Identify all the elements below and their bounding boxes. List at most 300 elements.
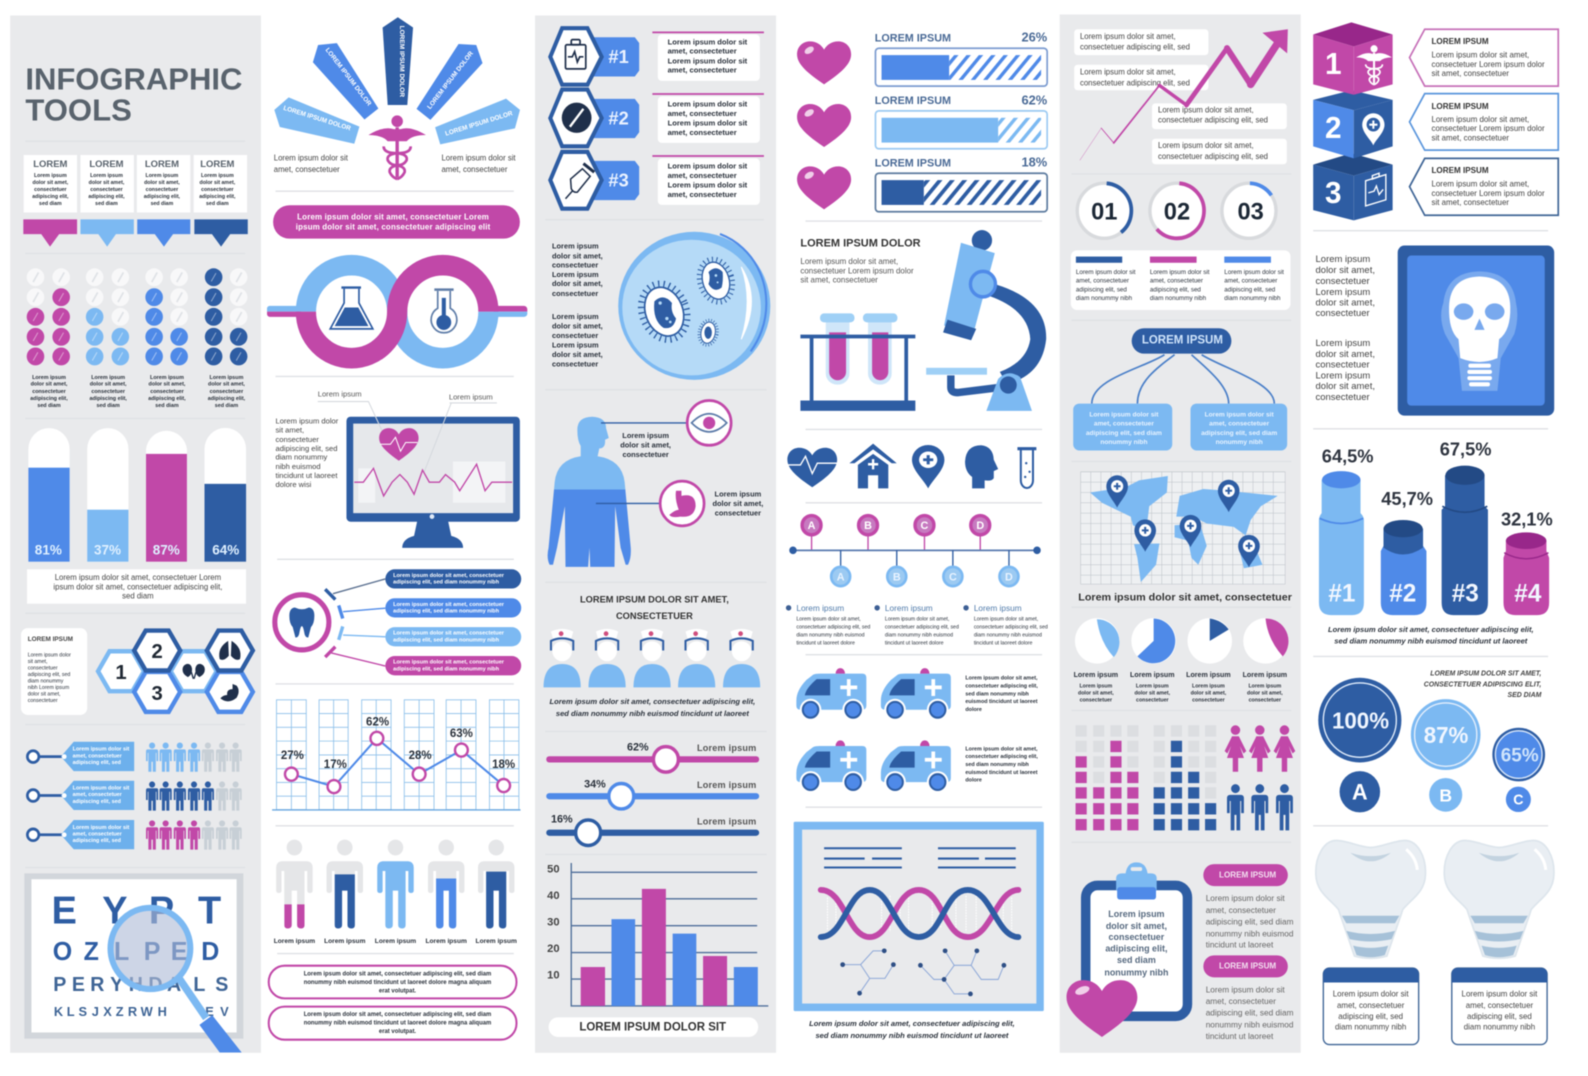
callouts beside cubes: consectetuer Lorem ipsum dolor (1431, 189, 1545, 198)
eye chart with magnifier: L (114, 938, 129, 966)
fan captions: amet, consectetuer (274, 165, 340, 174)
side notes with pills: tincidunt ut laoreet (1206, 939, 1274, 949)
monitor labels and description (275, 390, 493, 489)
icon: syringe (566, 164, 594, 199)
stomach callout (660, 481, 763, 526)
pie charts: Lorem ipsum (1136, 684, 1169, 690)
x-ray text: dolor sit amet, (1316, 381, 1375, 392)
bar chart: 30 (547, 916, 560, 928)
eye chart with magnifier: K (54, 1004, 64, 1019)
percentage circles: A (1352, 779, 1368, 805)
callout cards: LOREM (89, 159, 124, 170)
capsule bar chart: 37% (94, 542, 121, 557)
percentage circles (1318, 678, 1545, 812)
clipboard note: adipiscing elit, (1105, 943, 1167, 954)
lab heading: Lorem ipsum dolor sit amet, (800, 257, 898, 266)
timeline axis: A (837, 571, 845, 583)
tag rows with people pictograms: Lorem ipsum dolor sit (73, 786, 129, 792)
stomach callout: dolor sit amet, (712, 499, 763, 508)
capsule bar chart (28, 428, 246, 562)
x-ray text: consectetuer (1316, 276, 1371, 287)
cylinder chart: #3 (1452, 580, 1479, 607)
monitor labels and description: adipiscing elit, sed (275, 444, 337, 453)
callouts beside cubes: sit amet, consectetuer (1431, 133, 1509, 143)
petri dish text: consectetuer (552, 331, 598, 340)
cylinder chart values (1322, 438, 1553, 530)
rising arrow chart text boxes: Lorem ipsum dolor sit amet, (1080, 32, 1176, 41)
timeline text columns: Lorem ipsum dolor sit amet, (885, 617, 949, 623)
icon row (787, 444, 1036, 488)
bar chart caption (27, 569, 246, 604)
pie charts: dolor sit amet, (1078, 691, 1114, 697)
callout cards: LOREM (200, 159, 234, 170)
sliders (549, 742, 756, 845)
ambulance text: dolore (965, 707, 982, 713)
percentage circles: B (1439, 785, 1452, 805)
branching diagram: LOREM IPSUM (1142, 334, 1223, 347)
monitor labels and description: Lorem ipsum (449, 392, 493, 402)
petri dish text: consectetuer (552, 359, 598, 368)
title: TOOLS (25, 92, 132, 128)
rising arrow chart text boxes (1074, 29, 1287, 164)
timeline text columns: diam nonummy nibh euismod (796, 632, 865, 638)
tag rows with people pictograms: Lorem ipsum dolor sit (73, 825, 129, 831)
DNA caption: Lorem ipsum dolor sit amet, consectetuer adipiscing elit, (809, 1019, 1015, 1028)
implant cards: Lorem ipsum dolor sit (1333, 990, 1409, 999)
sliders: Lorem ipsum (697, 816, 756, 826)
fan captions: Lorem ipsum dolor sit (274, 153, 349, 163)
cylinder chart caption: sed diam nonummy nibh euismod tincidunt ut laoreet (1334, 637, 1528, 646)
heart progress bars (797, 30, 1048, 212)
line chart on grid columns: 27% (281, 749, 304, 762)
text cards with magenta rules: Lorem ipsum dolor sit (668, 37, 748, 46)
tag rows with people pictograms: adipiscing elit, sed (73, 760, 121, 766)
eye chart with magnifier: P (144, 938, 160, 966)
numbered hexagon badges (550, 28, 639, 209)
side notes with pills: amet, consectetuer (1206, 996, 1276, 1006)
petri dish text: dolor sit amet, (552, 321, 603, 331)
clipboard note: consectetuer (1109, 932, 1165, 942)
fan of ribbons (270, 17, 525, 151)
clipboard note: nonummy nibh (1104, 967, 1168, 977)
branching diagram: amet, consectetuer (1209, 421, 1270, 428)
branching diagram: Lorem ipsum dolor sit (1089, 411, 1159, 418)
fan captions: amet, consectetuer (441, 165, 508, 174)
callout cards: Lorem ipsum (90, 173, 123, 179)
callout cards: sed diam (151, 201, 174, 207)
callout cards: consectetuer (90, 187, 123, 193)
pie charts: Lorem ipsum (1248, 684, 1282, 690)
side notes with pills: nonummy nibh euismod (1206, 1019, 1294, 1029)
text cards with magenta rules: amet, consectetuer (668, 190, 737, 199)
text cards with magenta rules: amet, consectetuer (668, 65, 737, 74)
heart progress bars: 18% (1021, 155, 1048, 170)
nurses row (544, 629, 760, 687)
body silhouettes: Lorem ipsum (476, 938, 517, 945)
cylinder chart values: 32,1% (1501, 508, 1553, 530)
fan of ribbons: LOREM IPSUM DOLOR (398, 26, 405, 97)
x-ray text: Lorem ipsum (1316, 338, 1370, 349)
icon: location pin (912, 445, 944, 488)
x-ray text: consectetuer (1316, 308, 1371, 319)
tooth spoke diagram: Lorem ipsum dolor sit amet, consectetuer (393, 660, 505, 666)
sliders: Lorem ipsum (697, 743, 756, 753)
tooth spoke diagram: adipiscing elit, sed diam nonummy nibh (393, 666, 500, 673)
callout cards: consectetuer (201, 187, 234, 193)
pie charts: Lorem ipsum (1192, 684, 1225, 690)
x-ray text: Lorem ipsum (1316, 370, 1370, 382)
numbered hexagon badges: #2 (608, 108, 629, 129)
eye chart with magnifier: W (141, 1004, 154, 1019)
text cards with magenta rules: Lorem ipsum dolor sit (668, 162, 748, 171)
eye chart with magnifier: P (149, 889, 174, 933)
pill grid chart: consectetuer (32, 389, 67, 395)
eye chart with magnifier: J (92, 1004, 99, 1019)
tag rows with people pictograms: Lorem ipsum dolor sit (73, 747, 129, 753)
implant cards: Lorem ipsum dolor sit (1462, 990, 1538, 999)
eye callout: dolor sit amet, (620, 441, 671, 450)
capsule bar chart: 81% (35, 542, 62, 557)
side notes with pills (1203, 864, 1294, 1041)
petri dish text: dolor sit amet, (552, 251, 603, 260)
rising arrow chart text boxes: consectetuer adipiscing elit, sed (1158, 152, 1268, 161)
petri dish with bacteria (601, 209, 787, 403)
timeline axis: C (949, 571, 957, 583)
x-ray text: consectetuer (1316, 359, 1371, 370)
cube 3: 3 (1325, 177, 1342, 210)
ambulance text: dolore (965, 777, 982, 783)
body silhouettes (274, 840, 517, 945)
pill grid chart: Lorem ipsum (32, 375, 66, 381)
text cards with magenta rules: amet, consectetuer (668, 109, 737, 118)
cylinder chart: #4 (1514, 580, 1542, 607)
dental implants (1316, 841, 1554, 958)
title (25, 61, 242, 128)
map caption: Lorem ipsum dolor sit amet, consectetuer (1078, 593, 1292, 604)
x-ray skull (1398, 246, 1554, 416)
chart footer label (549, 1017, 758, 1037)
outlined capsule notes: nonummy nibh euismod tincidunt ut laoreet dolore magna aliquam (304, 980, 491, 986)
eye chart with magnifier: L (193, 974, 205, 996)
side notes with pills: adipiscing elit, sed diam (1206, 917, 1294, 927)
pie charts: dolor sit amet, (1134, 691, 1171, 697)
text card: lorem ipsum: Lorem ipsum dolor (28, 652, 71, 658)
bar chart: 10 (547, 970, 560, 982)
tooth spoke diagram: adipiscing elit, sed diam nonummy nibh (393, 638, 500, 644)
petri dish text (552, 242, 603, 368)
pill grid chart: dolor sit amet, (90, 382, 127, 388)
icon: conical flask (330, 288, 373, 329)
implant cards: adipiscing elit, sed (1467, 1012, 1532, 1021)
eye chart with magnifier: H (158, 1004, 167, 1019)
sliders: 16% (551, 813, 573, 825)
implant cards: diam nonummy nibh (1464, 1023, 1535, 1032)
circles heading: LOREM IPSUM DOLOR SIT AMET, (1430, 670, 1541, 677)
percentage circles: 100% (1332, 708, 1389, 733)
lab heading: consectetuer Lorem ipsum dolor (800, 266, 914, 275)
text card: lorem ipsum: LOREM IPSUM (28, 636, 73, 643)
cylinder chart values: 64,5% (1322, 445, 1374, 467)
pill grid chart: dolor sit amet, (31, 382, 68, 388)
ambulance text: consectetuer adipiscing elit, (965, 683, 1038, 689)
callouts beside cubes: LOREM IPSUM (1431, 37, 1489, 46)
timeline text columns: Lorem ipsum (974, 603, 1022, 613)
implant cards: adipiscing elit, sed (1338, 1012, 1403, 1021)
timeline text columns: Lorem ipsum (796, 603, 844, 613)
rising arrow chart text boxes: Lorem ipsum dolor sit amet, (1158, 105, 1254, 114)
eye chart with magnifier: E (72, 974, 85, 996)
stomach callout: consectetuer (715, 508, 761, 518)
magenta banner (273, 205, 520, 239)
percentage circles: C (1513, 792, 1523, 809)
callouts beside cubes: sit amet, consectetuer (1431, 69, 1509, 78)
line chart on grid columns: 18% (492, 758, 515, 771)
pie charts (1074, 618, 1288, 704)
rising arrow chart text boxes: Lorem ipsum dolor sit amet, (1080, 68, 1176, 77)
three column note: diam nonummy nibh (1224, 295, 1281, 302)
callout cards: adipiscing elit, (199, 194, 236, 200)
stomach callout: Lorem ipsum (715, 490, 762, 499)
body silhouettes: Lorem ipsum (324, 938, 366, 945)
icon: heart pulse (787, 448, 838, 487)
cylinder chart values: 67,5% (1440, 438, 1491, 460)
rising arrow chart text boxes: consectetuer adipiscing elit, sed (1080, 43, 1190, 52)
panel: right grey column (1060, 14, 1301, 1053)
ambulance text: consectetuer adipiscing elit, (965, 754, 1038, 760)
panel: left grey column (10, 15, 261, 1053)
branching diagram: nonummy nibh (1216, 439, 1263, 446)
line chart on grid columns: 17% (324, 758, 347, 771)
three column note: diam nonummy nibh (1076, 295, 1133, 302)
text cards with magenta rules: amet, consectetuer (668, 47, 737, 56)
cylinder chart caption: Lorem ipsum dolor sit amet, consectetuer adipiscing elit, (1328, 625, 1534, 634)
fan of ribbons: LOREM IPSUM DOLOR (324, 47, 373, 108)
petri dish text: dolor sit amet, (552, 279, 603, 288)
progress ring 01 (1075, 181, 1134, 241)
numbered hexagon badges: #1 (608, 46, 629, 67)
callout cards: LOREM (145, 159, 179, 170)
eye chart with magnifier: S (79, 1004, 87, 1019)
progress ring 03 (1221, 182, 1277, 239)
three column note: Lorem ipsum dolor sit (1150, 269, 1210, 276)
hexagon organ diagram: 2 (152, 640, 163, 663)
eye chart with magnifier: A (167, 974, 181, 996)
lab heading (800, 237, 921, 285)
cube 3 (1313, 153, 1393, 220)
ambulance text: sed diam nonummy nibh (965, 762, 1029, 768)
nurses caption: Lorem ipsum dolor sit amet, consectetuer adipiscing elit, (550, 697, 755, 706)
timeline text columns: diam nonummy nibh euismod (885, 632, 953, 638)
fan captions (274, 153, 516, 174)
progress ring 03: 03 (1238, 199, 1264, 226)
callout cards: consectetuer (146, 187, 178, 193)
ambulance text: Lorem ipsum dolor sit amet, (965, 675, 1038, 681)
eye chart with magnifier: P (53, 974, 66, 996)
tooth spoke diagram: adipiscing elit, sed diam nonummy nibh (393, 580, 500, 586)
capsule bar chart: 64% (212, 542, 239, 557)
petri dish text: dolor sit amet, (552, 350, 603, 359)
sliders: Lorem ipsum (697, 780, 756, 790)
tooth spoke diagram: Lorem ipsum dolor sit amet, consectetuer (393, 602, 505, 608)
side notes with pills: Lorem ipsum dolor sit (1206, 984, 1285, 995)
timeline axis: D (1005, 571, 1013, 583)
fan captions: Lorem ipsum dolor sit (441, 153, 516, 163)
text card: lorem ipsum: diam nonummy (28, 679, 64, 685)
callout cards: sed diam (39, 201, 62, 207)
side notes with pills: Lorem ipsum dolor sit (1206, 893, 1285, 903)
heart progress bars: 62% (1021, 92, 1048, 107)
eye chart with magnifier: T (198, 889, 221, 933)
monitor labels and description: sit amet, (275, 425, 304, 435)
branching diagram: Lorem ipsum dolor sit (1205, 411, 1274, 418)
line chart on grid columns: 28% (409, 749, 432, 762)
text cards with magenta rules: Lorem ipsum dolor sit (668, 100, 748, 109)
capsule bar chart: 87% (153, 542, 180, 557)
timeline text columns: consectetuer adipiscing elit, sed (796, 624, 870, 631)
cube 1 (1313, 22, 1393, 95)
callout cards: adipiscing elit, (88, 194, 125, 200)
monitor labels and description: Lorem ipsum dolor (275, 417, 339, 426)
callout cards: dolor sit amet, (89, 180, 125, 186)
clipboard note: Lorem ipsum (1108, 909, 1165, 919)
pill grid chart: sed diam (37, 403, 61, 409)
monitor labels and description: consectetuer (275, 435, 319, 444)
eye chart with magnifier: Z (84, 938, 99, 966)
infinity loop diagram (267, 265, 527, 358)
three column note (1071, 250, 1291, 310)
pie charts: Lorem ipsum (1130, 671, 1175, 679)
timeline text columns: diam nonummy nibh euismod (974, 632, 1042, 638)
callout cards: adipiscing elit, (144, 194, 181, 200)
panel: centre grey column (535, 15, 776, 1053)
pie charts: Lorem ipsum (1186, 671, 1231, 679)
eye chart with magnifier: V (220, 1004, 229, 1019)
timeline text columns: Lorem ipsum (885, 603, 933, 613)
nurses heading: LOREM IPSUM DOLOR SIT AMET, (580, 595, 729, 605)
callout cards: dolor sit amet, (33, 180, 69, 186)
fan of ribbons: LOREM IPSUM DOLOR (444, 110, 514, 138)
lab heading: sit amet, consectetuer (800, 276, 878, 285)
rising arrow (1080, 29, 1288, 160)
ambulance text: sed diam nonummy nibh (965, 691, 1029, 697)
icon: clinic house (849, 444, 897, 488)
pill grid chart: consectetuer (91, 389, 126, 395)
eye chart with magnifier: R (90, 974, 104, 996)
circles heading: SED DIAM (1508, 692, 1542, 699)
callouts beside cubes: Lorem ipsum dolor sit amet, (1431, 115, 1529, 124)
eye chart with magnifier: R (128, 1004, 138, 1019)
ambulance text: Lorem ipsum dolor sit amet, (965, 746, 1038, 752)
line chart on grid columns (272, 700, 521, 810)
heart progress bars: LOREM IPSUM (875, 32, 951, 44)
tooth spoke diagram: Lorem ipsum dolor sit amet, consectetuer (393, 573, 505, 579)
body silhouettes: Lorem ipsum (375, 938, 416, 945)
pill grid chart: adipiscing elit, (89, 396, 127, 402)
line chart on grid columns: 63% (450, 727, 473, 740)
timeline top markers: A (808, 520, 816, 532)
text card: lorem ipsum: dolor sit amet, (28, 692, 60, 698)
text card: lorem ipsum: consectetuer (28, 698, 58, 704)
three column note: amet, consectetuer (1224, 278, 1277, 285)
eye chart with magnifier: Y (110, 974, 123, 996)
hexagon organ diagram (98, 631, 253, 712)
three column note: adipiscing elit, sed (1076, 286, 1127, 293)
petri dish text: Lorem ipsum (552, 270, 599, 279)
lab heading: LOREM IPSUM DOLOR (800, 237, 921, 250)
tag rows with people pictograms: amet, consectetuer (73, 792, 123, 798)
callouts beside cubes: Lorem ipsum dolor sit amet, (1431, 180, 1529, 189)
pie charts: Lorem ipsum (1079, 684, 1113, 690)
heart progress bars: LOREM IPSUM (875, 95, 951, 107)
nurses heading: CONSECTETUER (616, 611, 693, 621)
three column note: Lorem ipsum dolor sit (1224, 269, 1284, 276)
petri dish text: Lorem ipsum (552, 340, 599, 350)
petri dish text: consectetuer (552, 289, 598, 298)
icon: pill (562, 103, 592, 133)
hexagon organ diagram: 3 (152, 682, 163, 705)
text card: lorem ipsum: consectetuer (28, 665, 58, 672)
icon: caduceus (368, 115, 426, 179)
bar chart caption: Lorem ipsum dolor sit amet, consectetuer Lorem (55, 573, 221, 582)
rising arrow chart text boxes: consectetuer adipiscing elit, sed (1080, 78, 1190, 87)
callout cards: sed diam (206, 201, 229, 207)
percentage circles: 65% (1501, 745, 1539, 766)
pill grid chart: Lorem ipsum (210, 375, 244, 381)
sliders: 34% (584, 779, 606, 791)
icon: test tube (1017, 449, 1036, 488)
bar chart caption: sed diam (122, 591, 154, 601)
cube 2 (1313, 90, 1393, 158)
pie charts: Lorem ipsum (1074, 671, 1118, 679)
outlined capsule notes: nonummy nibh euismod tincidunt ut laoreet dolore magna aliquam (304, 1021, 491, 1027)
timeline text columns: Lorem ipsum dolor sit amet, (796, 617, 861, 623)
monitor labels and description: Lorem ipsum (318, 390, 362, 399)
x-ray text: dolor sit amet, (1316, 265, 1375, 276)
eye chart with magnifier: Z (116, 1004, 124, 1019)
nurses caption: sed diam nonummy nibh euismod tincidunt ut laoreet (556, 709, 749, 718)
pill grid chart: sed diam (215, 403, 238, 409)
timeline text columns: tincidunt ut laoreet dolore (796, 640, 855, 646)
implant cards: diam nonummy nibh (1335, 1023, 1406, 1032)
eye chart with magnifier (24, 873, 243, 1052)
pill grid chart: dolor sit amet, (149, 382, 186, 388)
callout cards: consectetuer (34, 187, 67, 193)
text cards with magenta rules: amet, consectetuer (668, 171, 737, 180)
x-ray text: Lorem ipsum (1316, 254, 1370, 265)
eye chart with magnifier: E (52, 889, 77, 933)
microscope (926, 230, 1046, 411)
heart progress bars: 26% (1021, 30, 1048, 45)
hexagon organ diagram: 1 (115, 661, 127, 684)
side notes with pills: tincidunt ut laoreet (1206, 1031, 1274, 1041)
icon: head profile (965, 445, 998, 488)
text cards with magenta rules: amet, consectetuer (668, 128, 737, 137)
callouts beside cubes (1410, 29, 1558, 215)
bar chart caption: ipsum dolor sit amet, consectetuer adipiscing elit, (53, 583, 222, 592)
tag rows with people pictograms (27, 742, 242, 850)
callout cards: adipiscing elit, (32, 194, 69, 200)
eye callout: consectetuer (622, 450, 669, 459)
eye callout (596, 401, 731, 503)
chart footer label: LOREM IPSUM DOLOR SIT (579, 1021, 726, 1034)
tag rows with people pictograms: amet, consectetuer (73, 753, 123, 759)
pie charts: consectetuer (1080, 697, 1112, 704)
branching diagram: adipiscing elit, sed diam (1086, 430, 1162, 437)
petri dish text: Lorem ipsum (552, 242, 599, 251)
pie charts: Lorem ipsum (1243, 671, 1287, 679)
timeline text columns: consectetuer adipiscing elit, sed (974, 624, 1048, 631)
timeline text columns (786, 603, 1048, 646)
